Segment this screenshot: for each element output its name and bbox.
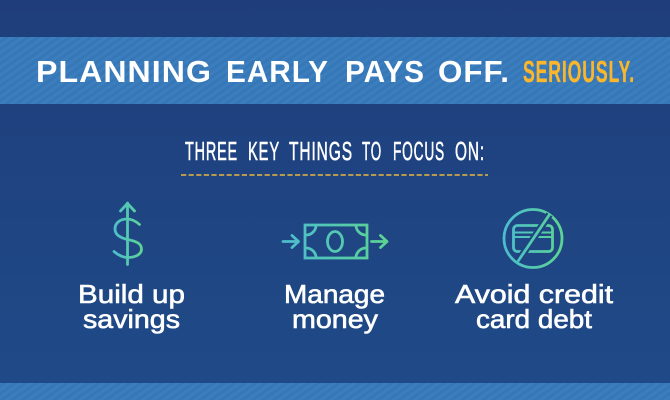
- title: planning early pays off: PAYS: [345, 55, 425, 89]
- title: planning early pays off: EARLY: [226, 55, 329, 89]
- subheading: three key things: TO: [362, 136, 382, 166]
- subheading: three key things: [185, 136, 485, 166]
- label: build up savings: [78, 279, 185, 334]
- title: planning early pays off: OFF.: [438, 55, 510, 89]
- icon: banknote with arrows: [283, 225, 387, 258]
- label: avoid credit card debt: Avoid credit: [455, 279, 614, 309]
- subheading: three key things: KEY: [248, 136, 280, 166]
- column: build up savings: [78, 203, 185, 334]
- subheading: three key things: FOCUS: [393, 136, 445, 166]
- banner: title band: [0, 37, 670, 104]
- dashed divider: [181, 174, 488, 176]
- bottom band: [0, 383, 670, 400]
- label: avoid credit card debt: card debt: [476, 304, 593, 334]
- column: manage money: [283, 225, 387, 334]
- subheading: three key things: THINGS: [289, 136, 353, 166]
- label: manage money: [284, 279, 385, 334]
- icon: crossed-out credit card: [504, 210, 562, 268]
- subheading: three key things: THREE: [185, 136, 238, 166]
- column: avoid credit card debt: [455, 210, 614, 334]
- label: build up savings: Build up: [78, 279, 185, 309]
- icon: dollar sign with up arrow: [114, 203, 142, 264]
- title: planning early pays off: [36, 55, 510, 89]
- label: manage money: Manage: [284, 279, 385, 309]
- label: avoid credit card debt: [455, 279, 614, 334]
- title: planning early pays off: PLANNING: [36, 55, 212, 89]
- label: build up savings: savings: [83, 304, 180, 334]
- subheading: three key things: ON:: [455, 136, 485, 166]
- label: manage money: money: [292, 304, 378, 334]
